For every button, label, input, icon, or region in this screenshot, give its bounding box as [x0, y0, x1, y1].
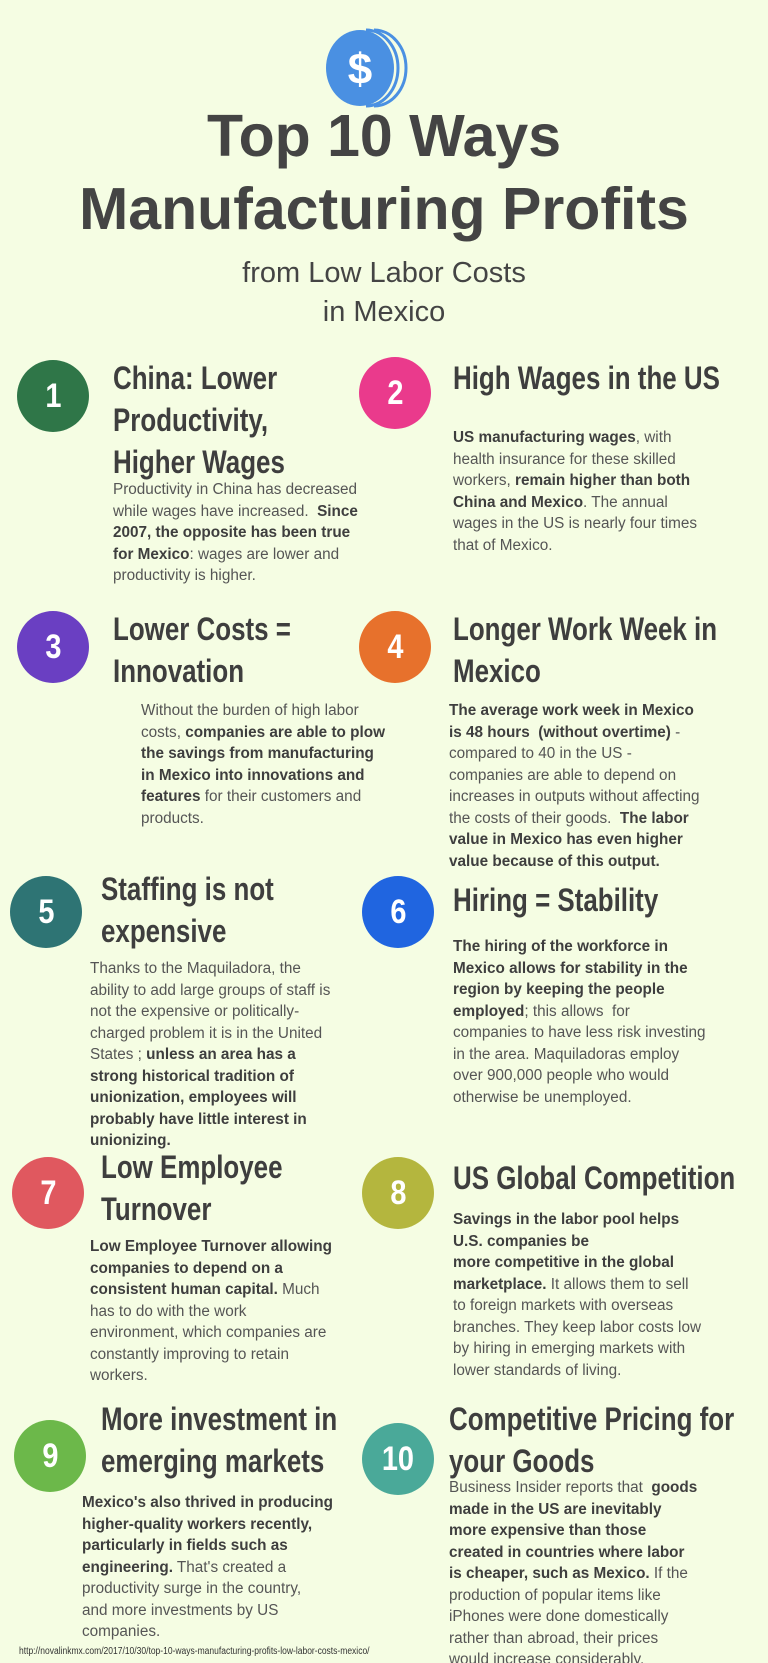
- text 1: productivity is higher.: [113, 567, 256, 584]
- text 3: costs, companies are able to plow: [141, 724, 385, 740]
- icon: dollar coin: [326, 28, 408, 108]
- text 9: and more investments by US: [82, 1602, 278, 1618]
- circle 5: [10, 876, 82, 948]
- text 8: to foreign markets with overseas: [453, 1297, 673, 1314]
- text 8: by hiring in emerging markets with: [453, 1340, 685, 1357]
- text 6: in the area. Maquiladoras employ: [453, 1046, 679, 1062]
- text 8: Savings in the labor pool helps: [453, 1211, 679, 1228]
- text 7: consistent human capital. Much: [90, 1281, 320, 1298]
- heading 8: US Global Competition: [453, 1160, 735, 1196]
- text 1: for Mexico: wages are lower and: [113, 546, 339, 562]
- title: [79, 103, 689, 242]
- text 1: Productivity in China has decreased: [113, 481, 357, 498]
- panel 2: [359, 357, 720, 554]
- panel 8: [362, 1157, 735, 1378]
- heading 4: Mexico: [453, 653, 541, 689]
- text 6: companies to have less risk investing: [453, 1024, 706, 1041]
- text 8: branches. They keep labor costs low: [453, 1318, 701, 1336]
- text 9: companies.: [82, 1623, 160, 1640]
- text 3: Without the burden of high labor: [141, 702, 359, 719]
- title: Manufacturing Profits: [79, 176, 689, 242]
- icon: dollar coin: $: [348, 45, 372, 94]
- text 6: [453, 938, 706, 1106]
- text 6: employed; this allows for: [453, 1002, 630, 1020]
- heading 2: High Wages in the US: [453, 360, 720, 396]
- text 7: has to do with the work: [90, 1302, 246, 1320]
- text 10: is cheaper, such as Mexico. If the: [449, 1565, 688, 1582]
- text 4: The average work week in Mexico: [449, 702, 694, 719]
- text 7: environment, which companies are: [90, 1324, 326, 1341]
- circle 5: 5: [38, 892, 54, 930]
- heading 3: Innovation: [113, 653, 244, 689]
- circle 6: 6: [390, 892, 406, 930]
- text 2: wages in the US is nearly four times: [453, 515, 697, 532]
- text 5: States ; unless an area has a: [90, 1046, 296, 1063]
- circle 4: 4: [387, 628, 403, 666]
- heading 7: Low Employee: [101, 1149, 282, 1185]
- text 2: China and Mexico. The annual: [453, 494, 668, 510]
- text 5: unionization, employees will: [90, 1089, 297, 1106]
- text 3: [141, 702, 385, 826]
- text 10: Business Insider reports that goods: [449, 1479, 697, 1496]
- text 2: health insurance for these skilled: [453, 450, 676, 468]
- text 9: productivity surge in the country,: [82, 1580, 301, 1597]
- circle 10: 10: [382, 1440, 414, 1478]
- text 10: made in the US are inevitably: [449, 1500, 662, 1518]
- text 10: [449, 1479, 697, 1663]
- heading 3: Lower Costs =: [113, 611, 291, 647]
- circle 2: 2: [387, 374, 403, 412]
- text 4: compared to 40 in the US -: [449, 745, 632, 762]
- text 3: the savings from manufacturing: [141, 745, 374, 762]
- panel 7: [12, 1149, 332, 1384]
- text 8: lower standards of living.: [453, 1362, 621, 1378]
- text 4: [449, 702, 700, 870]
- panel 3: [17, 611, 385, 826]
- text 10: rather than abroad, their prices: [449, 1630, 658, 1646]
- footer source url: http://novalinkmx.com/2017/10/30/top-10-ways-manufacturing-profits-low-labor-costs-mexico/: [19, 1646, 370, 1657]
- heading 4: Longer Work Week in: [453, 611, 717, 647]
- panel 4: [359, 611, 717, 870]
- heading 5: [101, 871, 274, 949]
- text 1: while wages have increased. Since: [113, 502, 358, 520]
- text 3: products.: [141, 810, 204, 826]
- circle 10: [362, 1423, 434, 1495]
- heading 5: expensive: [101, 913, 226, 949]
- panel 1: [17, 360, 358, 584]
- circle 4: [359, 611, 431, 683]
- text 9: Mexico's also thrived in producing: [82, 1494, 333, 1511]
- circle 9: 9: [42, 1436, 58, 1474]
- panel 5: [10, 871, 330, 1149]
- heading 7: [101, 1149, 282, 1227]
- text 7: [90, 1238, 332, 1384]
- text 5: charged problem it is in the United: [90, 1024, 322, 1042]
- text 10: more expensive than those: [449, 1522, 646, 1539]
- text 2: US manufacturing wages, with: [453, 429, 671, 446]
- text 8: U.S. companies be: [453, 1232, 589, 1250]
- text 7: constantly improving to retain: [90, 1346, 289, 1362]
- text 5: ability to add large groups of staff is: [90, 982, 330, 998]
- circle 7: [12, 1157, 84, 1229]
- text 7: workers.: [90, 1367, 148, 1384]
- text 5: not the expensive or politically-: [90, 1003, 299, 1020]
- text 9: higher-quality workers recently,: [82, 1516, 312, 1532]
- circle 6: [362, 876, 434, 948]
- text 4: the costs of their goods. The labor: [449, 810, 689, 826]
- text 7: companies to depend on a: [90, 1260, 283, 1276]
- text 8: more competitive in the global: [453, 1254, 674, 1271]
- text 6: Mexico allows for stability in the: [453, 960, 688, 976]
- heading 1: China: Lower: [113, 360, 277, 396]
- text 8: marketplace. It allows them to sell: [453, 1276, 689, 1292]
- text 4: value because of this output.: [449, 852, 660, 870]
- circle 9: [14, 1420, 86, 1492]
- text 7: Low Employee Turnover allowing: [90, 1238, 332, 1255]
- text 3: features for their customers and: [141, 788, 361, 805]
- text 3: in Mexico into innovations and: [141, 766, 365, 784]
- text 10: production of popular items like: [449, 1586, 661, 1604]
- heading 10: your Goods: [449, 1443, 594, 1479]
- text 5: strong historical tradition of: [90, 1068, 294, 1084]
- text 4: value in Mexico has even higher: [449, 831, 683, 848]
- text 4: increases in outputs without affecting: [449, 788, 700, 805]
- heading 1: Higher Wages: [113, 444, 285, 480]
- text 4: companies are able to depend on: [449, 766, 676, 784]
- text 5: probably have little interest in: [90, 1110, 307, 1128]
- title: Top 10 Ways: [207, 103, 561, 169]
- circle 3: [17, 611, 89, 683]
- heading 9: [101, 1401, 337, 1479]
- heading 1: [113, 360, 285, 480]
- subtitle: [242, 257, 526, 328]
- circle 2: [359, 357, 431, 429]
- text 5: [90, 960, 330, 1149]
- text 10: iPhones were done domestically: [449, 1608, 668, 1625]
- heading 9: emerging markets: [101, 1443, 324, 1479]
- circle 1: [17, 360, 89, 432]
- text 2: [453, 429, 697, 554]
- heading 5: Staffing is not: [101, 871, 274, 907]
- panel 10: [362, 1401, 734, 1663]
- text 5: unionizing.: [90, 1132, 171, 1149]
- text 4: is 48 hours (without overtime) -: [449, 724, 680, 740]
- circle 7: 7: [40, 1174, 56, 1212]
- subtitle: in Mexico: [323, 296, 445, 328]
- heading 1: Productivity,: [113, 402, 268, 438]
- heading 3: [113, 611, 291, 689]
- panel 6: [362, 876, 706, 1106]
- text 6: The hiring of the workforce in: [453, 938, 668, 955]
- heading 9: More investment in: [101, 1401, 337, 1437]
- text 9: engineering. That's created a: [82, 1558, 286, 1576]
- text 6: otherwise be unemployed.: [453, 1088, 632, 1106]
- text 5: Thanks to the Maquiladora, the: [90, 960, 301, 977]
- circle 3: 3: [45, 628, 61, 666]
- text 2: workers, remain higher than both: [453, 472, 690, 489]
- heading 10: Competitive Pricing for: [449, 1401, 734, 1437]
- heading 10: [449, 1401, 734, 1479]
- text 6: region by keeping the people: [453, 981, 665, 998]
- text 1: [113, 481, 358, 584]
- text 2: that of Mexico.: [453, 536, 552, 554]
- text 9: particularly in fields such as: [82, 1537, 288, 1554]
- text 10: created in countries where labor: [449, 1544, 684, 1560]
- subtitle: from Low Labor Costs: [242, 257, 526, 289]
- circle 8: [362, 1157, 434, 1229]
- text 9: [82, 1494, 333, 1640]
- text 8: [453, 1211, 701, 1378]
- heading 4: [453, 611, 717, 689]
- text 1: 2007, the opposite has been true: [113, 524, 350, 541]
- circle 8: 8: [390, 1174, 406, 1212]
- circle 1: 1: [45, 376, 61, 414]
- panel 9: [14, 1401, 337, 1640]
- heading 7: Turnover: [101, 1191, 211, 1227]
- heading 6: Hiring = Stability: [453, 882, 658, 918]
- text 6: over 900,000 people who would: [453, 1067, 669, 1084]
